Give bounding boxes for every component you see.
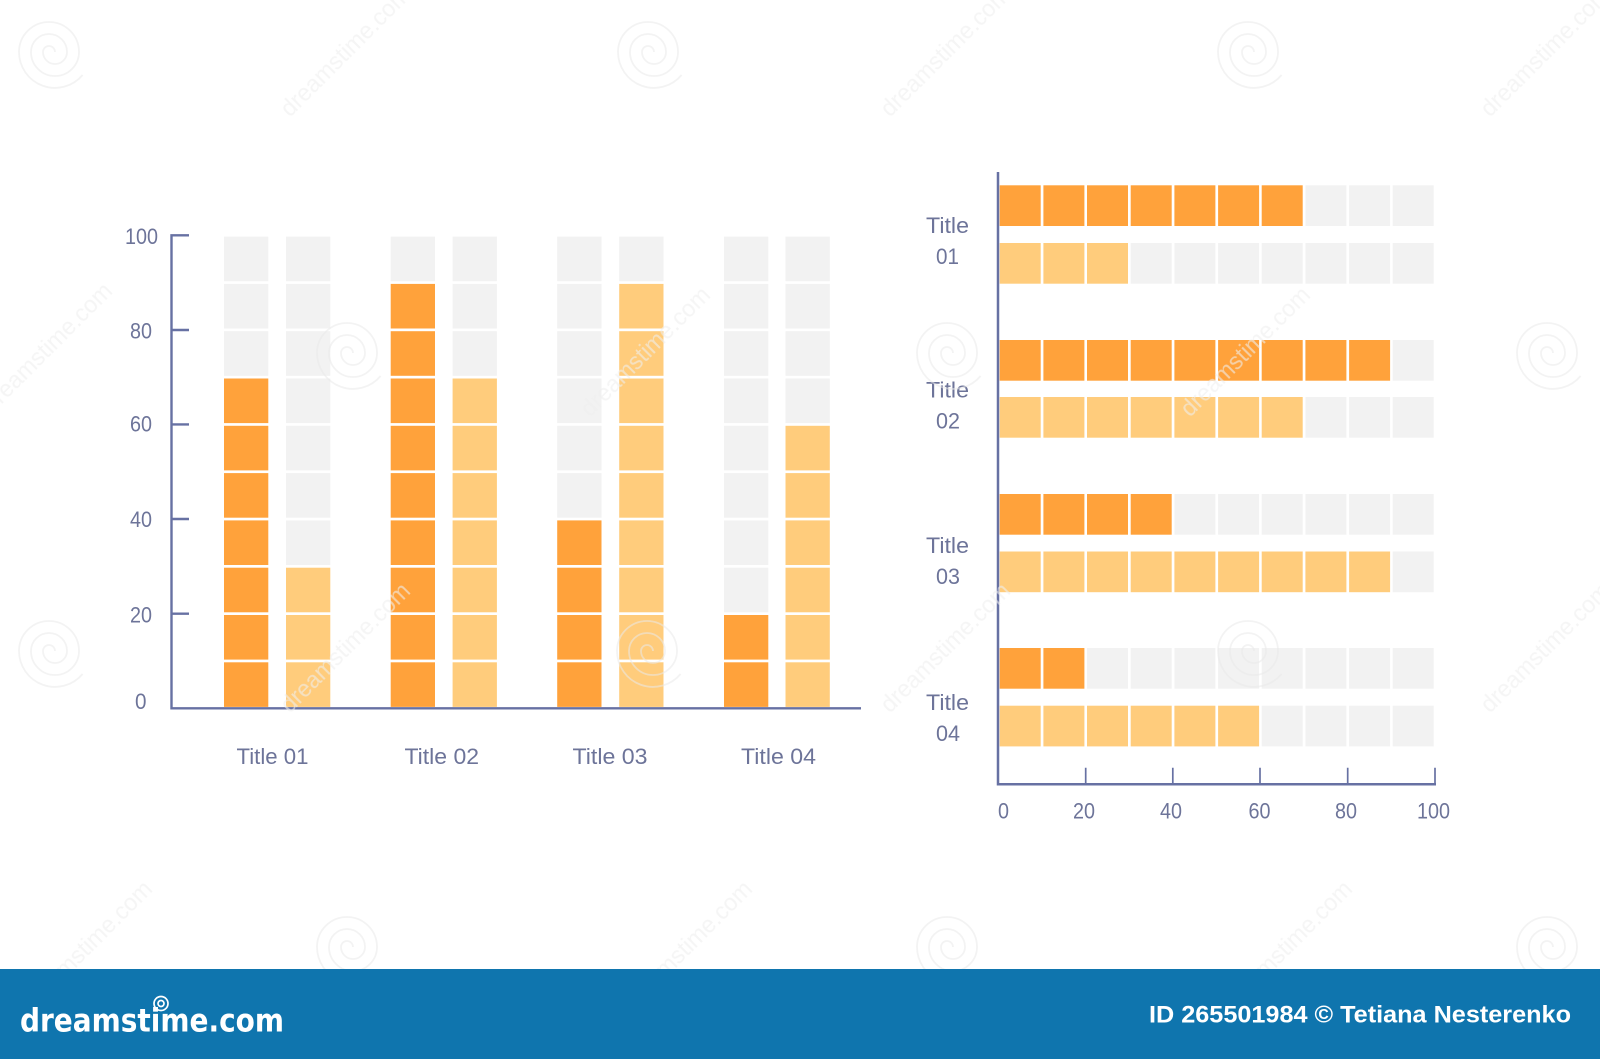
category labels — [926, 213, 969, 746]
category labels: 03 — [936, 564, 960, 589]
x-axis labels: Title 02 — [404, 744, 479, 769]
axes: horizontal chart — [998, 172, 1436, 784]
bar: Title 01 series B, 30 — [286, 237, 330, 707]
bar: Title 02 series A, 90 — [391, 237, 435, 707]
bar: Title 04 series B, 60 — [786, 237, 830, 707]
category labels: Title — [926, 377, 969, 402]
y-axis labels — [125, 224, 158, 714]
bar: Title 03 series B, 90 — [1000, 552, 1434, 592]
watermark: diagonal text: dreamstime.com — [275, 578, 416, 718]
bar: Title 04 series B, 60 — [1000, 706, 1434, 746]
bar: Title 03 series B, 90 — [619, 237, 664, 707]
category labels: 01 — [936, 244, 959, 269]
bar: Title 01 series A, 70 — [224, 237, 268, 707]
bar: Title 01 series B, 30 — [1000, 243, 1434, 284]
bar: Title 02 series A, 90 — [1000, 340, 1434, 381]
bar group: Title 03 horizontal — [1000, 494, 1434, 592]
value-axis labels: 20 — [1073, 798, 1095, 823]
footer image ID and author: ID 265501984 © Tetiana Nesterenko — [1149, 1001, 1571, 1028]
bar: Title 03 series A, 40 — [557, 237, 602, 707]
panel: horizontal bar chart — [926, 172, 1450, 823]
value-axis labels: 100 — [1417, 798, 1450, 823]
y-axis labels: 60 — [130, 412, 152, 437]
x-axis labels — [236, 744, 816, 769]
watermark: diagonal text: dreamstime.com — [17, 876, 158, 1016]
category labels: Title — [926, 213, 969, 238]
value-axis labels — [998, 798, 1450, 823]
axes: vertical chart — [172, 235, 861, 708]
category labels: 02 — [936, 408, 960, 433]
bar group: Title 02 — [391, 237, 497, 707]
bar group: Title 04 horizontal — [1000, 648, 1434, 746]
y-axis labels: 20 — [130, 602, 152, 627]
watermark: diagonal text: dreamstime.com — [575, 282, 716, 422]
value-axis labels: 80 — [1335, 798, 1357, 823]
bar group: Title 04 — [724, 237, 830, 707]
y-axis labels: 0 — [135, 689, 146, 714]
y-axis labels: 80 — [130, 319, 152, 344]
x-axis labels: Title 01 — [236, 744, 308, 769]
watermark: diagonal text: dreamstime.com — [875, 578, 1016, 718]
bar: Title 04 series A, 20 — [724, 237, 768, 707]
x-axis labels: Title 03 — [572, 744, 648, 769]
watermark: diagonal text: dreamstime.com — [1175, 282, 1316, 422]
value-axis labels: 40 — [1160, 798, 1182, 823]
value-axis labels: 0 — [998, 798, 1009, 823]
y-axis labels: 40 — [130, 507, 152, 532]
footer band — [0, 969, 1600, 1059]
watermark: diagonal text: dreamstime.com — [617, 876, 758, 1016]
bar: Title 01 series A, 70 — [1000, 185, 1434, 226]
category labels: Title — [926, 690, 969, 715]
bar: Title 03 series A, 40 — [1000, 494, 1434, 535]
bar group: Title 01 — [224, 237, 330, 707]
category labels: Title — [926, 533, 969, 558]
value-axis labels: 60 — [1248, 798, 1270, 823]
y-axis labels: 100 — [125, 224, 158, 249]
bar group: Title 01 horizontal — [1000, 185, 1434, 284]
icon: logo spiral — [154, 996, 168, 1010]
bar: Title 02 series B, 70 — [1000, 397, 1434, 438]
x-axis labels: Title 04 — [741, 744, 816, 769]
category labels: 04 — [936, 721, 960, 746]
watermark: diagonal text: dreamstime.com — [1217, 876, 1358, 1016]
footer logo wordmark: dreamstime.com — [20, 1002, 284, 1040]
bar group: Title 03 — [557, 237, 664, 707]
panel: vertical bar chart — [125, 224, 861, 769]
bar: Title 02 series B, 70 — [453, 237, 497, 707]
bar group: Title 02 horizontal — [1000, 340, 1434, 438]
bar: Title 04 series A, 20 — [1000, 648, 1434, 689]
